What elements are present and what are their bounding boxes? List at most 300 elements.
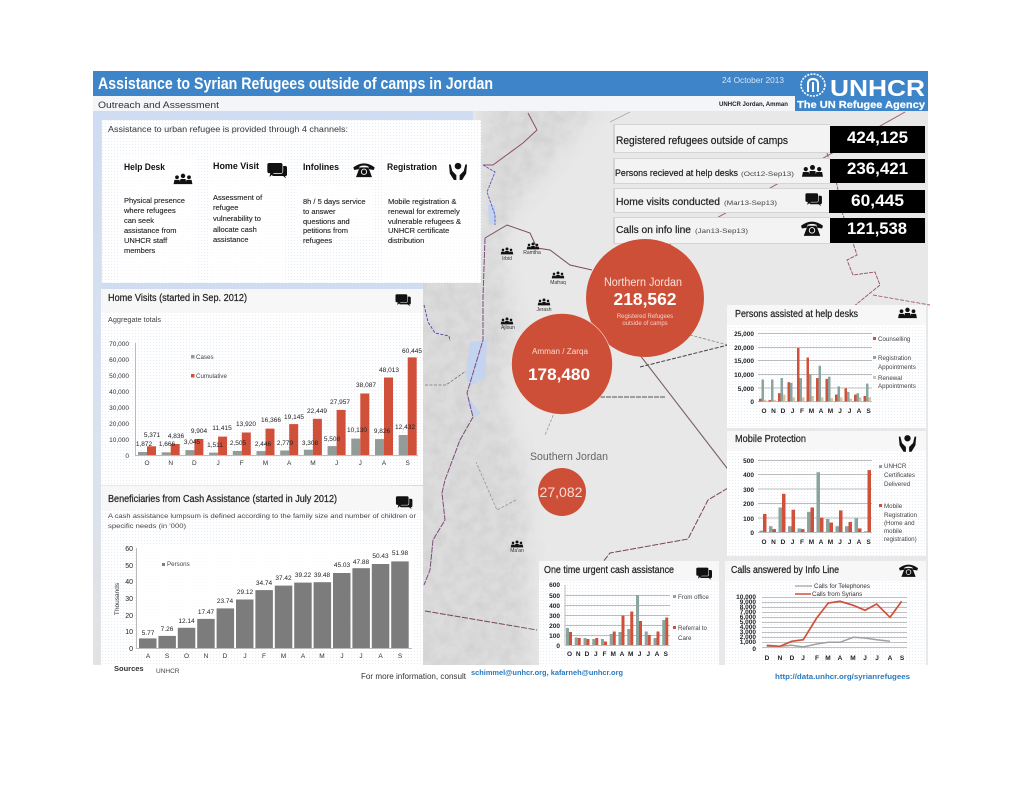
panel: channels — [93, 111, 481, 289]
channel: registration: renewal for extremely — [388, 207, 460, 216]
bar chart: beneficiaries: 7.26 — [161, 626, 174, 633]
heading — [539, 561, 719, 581]
channel: infolines: refugees — [303, 236, 332, 245]
bar chart: beneficiaries: M — [319, 653, 325, 660]
bar chart: urgent cash: J — [594, 651, 598, 658]
bar chart: mobile protection: J — [848, 539, 852, 546]
line chart: calls — [736, 583, 907, 662]
circle: Amman / Zarqa: Amman / Zarqa — [532, 347, 589, 356]
map city markers: Ramtha — [523, 250, 541, 256]
bar chart: home visits: 38,087 — [356, 382, 376, 389]
map: international borders — [424, 112, 930, 630]
circle: Northern Jordan: Registered Refugees — [617, 314, 673, 320]
bar chart: home visits: 4,836 — [168, 433, 185, 440]
circle: Southern Jordan — [538, 468, 586, 516]
channel: infolines: 8h / 5 days service — [303, 197, 366, 206]
bar chart: beneficiaries: J — [340, 653, 344, 660]
bar chart: beneficiaries: 10 — [125, 629, 133, 636]
legend: registration) — [884, 536, 917, 543]
bar chart: mobile protection — [743, 458, 918, 546]
channel: home visit — [213, 161, 287, 244]
channel: registration: vulnerable refugees & — [388, 217, 461, 226]
bar chart: home visits: 40,000 — [109, 389, 129, 396]
bar chart: beneficiaries: 20 — [125, 613, 133, 620]
bar chart: home visits: 50,000 — [109, 373, 129, 380]
footer: contact: For more information, consult — [361, 672, 467, 681]
figure: home visits: (Mar13-Sep13) — [724, 200, 777, 207]
bar chart: beneficiaries — [114, 545, 412, 660]
figure: registered refugees — [613, 124, 925, 153]
channel: registration — [387, 162, 467, 245]
bar chart: home visits — [109, 341, 422, 467]
heading — [725, 561, 926, 581]
bar chart: beneficiaries: A — [146, 653, 151, 660]
line chart: calls: A — [888, 655, 893, 662]
circle: Northern Jordan — [586, 239, 704, 357]
bar chart: home visits: 12,432 — [395, 424, 415, 431]
figure: calls on info line: (Jan13-Sep13) — [695, 228, 748, 235]
bar chart: beneficiaries: 50 — [125, 563, 133, 570]
bar chart: home visits: M — [263, 460, 268, 467]
bar chart: help desks: N — [771, 408, 776, 415]
legend: Calls for Telephones — [814, 583, 870, 590]
panel: key figures — [613, 124, 925, 244]
bar chart: urgent cash: M — [611, 651, 616, 658]
panel: home visits — [101, 289, 423, 485]
bar chart: home visits: 9,826 — [374, 428, 391, 435]
bar chart: help desks: M — [809, 408, 814, 415]
bar chart: home visits: 48,013 — [379, 367, 399, 374]
bar chart: beneficiaries: 0 — [129, 646, 133, 653]
bar chart: home visits: 9,904 — [191, 428, 208, 435]
bar chart: beneficiaries: O — [184, 653, 189, 660]
line chart: calls: N — [778, 655, 783, 662]
logo: UNHCR — [795, 71, 928, 111]
legend — [879, 463, 918, 543]
bar chart: home visits: 20,000 — [109, 421, 129, 428]
channel: infolines: Infolines — [303, 162, 339, 172]
line chart: calls: D — [790, 655, 795, 662]
panel: mobile protection — [727, 431, 926, 556]
channel: help desk: members — [124, 246, 156, 255]
line chart: calls: 1,000 — [740, 639, 756, 646]
line chart: calls: A — [838, 655, 843, 662]
bar chart: beneficiaries: 51.98 — [392, 550, 409, 557]
bar chart: beneficiaries: A — [301, 653, 306, 660]
channel: registration: Mobile registration & — [388, 197, 456, 206]
map city markers: Mafraq — [550, 280, 566, 286]
bar chart: mobile protection: A — [857, 539, 862, 546]
bar chart: home visits: 19,145 — [284, 414, 304, 421]
bar chart: mobile protection: F — [800, 539, 804, 546]
bar chart: help desks: 15,000 — [734, 358, 754, 365]
legend: Appointments — [878, 364, 916, 371]
line chart: calls: 8,000 — [740, 604, 756, 611]
note — [108, 513, 417, 530]
bar chart: beneficiaries: 30 — [125, 596, 133, 603]
heading: Calls answered by Info Line — [731, 565, 839, 576]
line chart: calls: 2,000 — [740, 634, 756, 641]
bar chart: mobile protection: S — [866, 539, 871, 546]
heading: Home Visits (started in Sep. 2012) — [108, 293, 247, 304]
bar chart: home visits: 13,920 — [236, 421, 256, 428]
legend: Delivered — [884, 481, 911, 488]
bar chart: home visits: 11,415 — [212, 425, 232, 432]
legend: Registration — [884, 512, 918, 519]
bar chart: help desks: 5,000 — [738, 386, 754, 393]
bar chart: beneficiaries: D — [223, 653, 228, 660]
bar chart: help desks: M — [828, 408, 833, 415]
channel: registration: Registration — [387, 162, 437, 172]
bar chart: beneficiaries: M — [281, 653, 286, 660]
bar chart: mobile protection: 0 — [750, 530, 754, 537]
bar chart: urgent cash: 300 — [549, 613, 560, 620]
note: A cash assistance lumpsum is defined according to the family size and number of children or — [108, 513, 417, 520]
bar chart: help desks: F — [800, 408, 804, 415]
channel: home visit: vulnerability to — [213, 214, 261, 223]
circle: Northern Jordan: 218,562 — [614, 289, 677, 309]
footer: contact — [361, 670, 623, 681]
figure: registered refugees: Registered refugees outside of camps — [616, 135, 788, 147]
bar chart: mobile protection: 200 — [743, 501, 754, 508]
bar chart: urgent cash: 400 — [549, 603, 560, 610]
legend: Care — [678, 635, 692, 642]
bar chart: mobile protection: D — [781, 539, 786, 546]
bar chart: beneficiaries: 39.22 — [295, 572, 312, 579]
figure: home visits: Home visits conducted — [616, 196, 720, 208]
channel: home visit: Assessment of — [213, 193, 263, 202]
figure: calls on info line: Calls on info line — [616, 224, 691, 236]
bar chart: home visits: 22,449 — [307, 408, 327, 415]
map: Jordan river and Dead Sea — [466, 205, 495, 418]
channel: help desk: UNHCR staff — [124, 236, 168, 245]
legend: Certificates — [884, 472, 915, 479]
bar chart: mobile protection: M — [828, 539, 833, 546]
line chart: calls: J — [801, 655, 805, 662]
bar chart: home visits: 1,666 — [159, 441, 176, 448]
bar chart: beneficiaries: J — [243, 653, 247, 660]
figure: home visits — [613, 188, 925, 213]
legend: Referral to — [678, 625, 707, 632]
bar chart: urgent cash: N — [576, 651, 581, 658]
bar chart: mobile protection: J — [791, 539, 795, 546]
bar chart: home visits: A — [382, 460, 387, 467]
legend: Calls from Syrians — [812, 591, 862, 598]
heading: One time urgent cash assistance — [544, 565, 674, 576]
bar chart: home visits: 10,130 — [347, 427, 367, 434]
circle: Northern Jordan: outside of camps — [622, 321, 668, 327]
bar chart: help desks: 25,000 — [734, 331, 754, 338]
bar chart: mobile protection: 500 — [743, 458, 754, 465]
legend: UNHCR — [884, 463, 907, 470]
panel: one time urgent cash — [539, 561, 719, 665]
footer: sources: UNHCR — [156, 668, 180, 675]
figure: persons at help desks: 236,421 — [847, 159, 908, 178]
channel: help desk: can seek — [124, 216, 154, 225]
bar chart: home visits: 27,957 — [330, 399, 350, 406]
bar chart: home visits: 16,366 — [261, 417, 281, 424]
figure: registered refugees: 424,125 — [847, 128, 908, 147]
line: Jordanian calls — [767, 637, 890, 647]
header band — [93, 71, 928, 96]
bar chart: home visits: 3,045 — [184, 439, 201, 446]
map city markers: Ajloun — [501, 325, 515, 331]
bar chart: mobile protection: 100 — [743, 516, 754, 523]
bar chart: beneficiaries: 60 — [125, 546, 133, 553]
bar chart: beneficiaries: 29.12 — [237, 589, 254, 596]
bar chart: beneficiaries: Thousands — [114, 582, 121, 615]
bar chart: home visits: 2,446 — [255, 441, 272, 448]
bar chart: home visits: 10,000 — [109, 437, 129, 444]
channel: help desk: Help Desk — [124, 162, 166, 172]
footer: sources: Sources — [114, 664, 144, 673]
legend: Mobile — [884, 503, 903, 510]
bar chart: home visits: 70,000 — [109, 341, 129, 348]
line chart: calls: J — [875, 655, 879, 662]
bar chart: home visits: 60,445 — [402, 348, 422, 355]
title: Assistance to Syrian Refugees outside of camps in Jordan — [98, 74, 493, 93]
map city markers: Ma'an — [510, 548, 524, 554]
legend: mobile — [884, 528, 903, 535]
bar chart: beneficiaries: 5.77 — [142, 630, 155, 637]
legend — [673, 594, 709, 642]
bar chart: mobile protection: M — [809, 539, 814, 546]
heading — [101, 486, 423, 510]
bar chart: help desks: J — [838, 408, 842, 415]
bar chart: home visits: J — [216, 460, 220, 467]
bar chart: help desks — [734, 331, 916, 415]
legend: From office — [678, 594, 709, 601]
bar chart: beneficiaries: 12.14 — [178, 618, 195, 625]
line chart: calls: D — [765, 655, 770, 662]
bar chart: home visits: 5,371 — [144, 432, 161, 439]
bar chart: urgent cash: D — [585, 651, 590, 658]
heading — [727, 305, 926, 325]
channel: home visit: allocate cash — [213, 225, 257, 234]
bar chart: beneficiaries: 34.74 — [256, 580, 273, 587]
legend: Cumulative — [196, 373, 228, 380]
line chart: calls: 0 — [752, 646, 756, 653]
footer: link: http://data.unhcr.org/syrianrefugees — [775, 674, 910, 681]
footer: sources — [114, 664, 180, 675]
circle: Southern Jordan: 27,082 — [540, 484, 583, 500]
figure: calls on info line — [613, 217, 925, 244]
bar chart: urgent cash — [549, 582, 709, 658]
bar chart: beneficiaries: 39.48 — [314, 572, 331, 579]
channel: infolines: to answer — [303, 207, 336, 216]
channel: help desk — [123, 162, 192, 255]
bar chart: beneficiaries: J — [359, 653, 363, 660]
line chart: calls: S — [900, 655, 905, 662]
figure: home visits: 60,445 — [851, 191, 904, 210]
heading — [101, 289, 423, 313]
label: Southern Jordan: Southern Jordan — [530, 451, 608, 463]
bar chart: help desks: D — [781, 408, 786, 415]
panel: cash assistance — [101, 486, 423, 665]
bar chart: home visits: 30,000 — [109, 405, 129, 412]
bar chart: home visits: 5,508 — [324, 436, 341, 443]
channel: infolines: questions and — [303, 217, 350, 226]
bar chart: beneficiaries: 45.03 — [334, 562, 351, 569]
footer: contact: schimmel@unhcr.org, kafarneh@unhcr.org — [471, 670, 623, 677]
bar chart: urgent cash: J — [638, 651, 642, 658]
bar chart: home visits: F — [240, 460, 244, 467]
line chart: calls: 6,000 — [740, 614, 756, 621]
bar chart: mobile protection: 400 — [743, 472, 754, 479]
bar chart: beneficiaries: 17.47 — [198, 609, 215, 616]
line chart: calls: 9,000 — [740, 599, 756, 606]
bar chart: home visits: N — [168, 460, 173, 467]
channel: home visit: Home Visit — [213, 161, 259, 171]
bar chart: home visits: D — [192, 460, 197, 467]
bar chart: urgent cash: 100 — [549, 633, 560, 640]
bar chart: home visits: 60,000 — [109, 357, 129, 364]
bar chart: beneficiaries: S — [165, 653, 170, 660]
legend: Persons — [167, 561, 190, 568]
bar chart: urgent cash: 500 — [549, 593, 560, 600]
bar chart: home visits: 2,779 — [277, 440, 294, 447]
bar chart: home visits: 1,511 — [207, 442, 223, 449]
subtitle: Outreach and Assessment — [98, 100, 220, 110]
heading: Persons assisted at help desks — [735, 309, 858, 320]
legend — [191, 354, 228, 380]
map background — [93, 110, 930, 665]
bar chart: urgent cash: A — [620, 651, 625, 658]
logo emblem — [801, 74, 825, 96]
office: UNHCR Jordan, Amman — [719, 101, 788, 108]
legend — [795, 583, 870, 598]
circle: Northern Jordan: Northern Jordan — [604, 277, 682, 289]
bar chart: beneficiaries: 50.43 — [372, 553, 389, 560]
bar chart: help desks: O — [761, 408, 767, 415]
bar chart: beneficiaries: 37.42 — [275, 575, 292, 582]
bar chart: urgent cash: A — [655, 651, 660, 658]
bar chart: urgent cash: S — [664, 651, 669, 658]
heading: Mobile Protection — [735, 434, 806, 445]
bar chart: mobile protection: J — [838, 539, 842, 546]
map city markers — [501, 242, 566, 554]
bar chart: urgent cash: 0 — [556, 643, 560, 650]
line chart: calls: 5,000 — [740, 619, 756, 626]
bar chart: urgent cash: F — [603, 651, 607, 658]
legend — [873, 336, 916, 390]
bar chart: mobile protection: O — [761, 539, 767, 546]
date: 24 October 2013 — [722, 76, 785, 85]
circle: Amman / Zarqa — [512, 314, 612, 414]
bar chart: beneficiaries: A — [378, 653, 383, 660]
channel: home visit: assistance — [213, 235, 248, 244]
legend: Appointments — [878, 383, 916, 390]
figure: persons at help desks: (Oct12-Sep13) — [741, 171, 794, 178]
line chart: calls: 10,000 — [736, 594, 756, 601]
bar chart: urgent cash: 200 — [549, 623, 560, 630]
bar chart: help desks: A — [819, 408, 824, 415]
bar chart: home visits: A — [287, 460, 292, 467]
bar chart: mobile protection: A — [819, 539, 824, 546]
panel: calls answered — [725, 561, 926, 665]
line chart: calls: 7,000 — [740, 609, 756, 616]
channel: home visit: refugee — [213, 203, 238, 212]
figure: persons at help desks — [613, 158, 925, 184]
bar chart: help desks: J — [848, 408, 852, 415]
channel: infolines — [303, 162, 375, 245]
legend: Registration — [878, 355, 912, 362]
bar chart: beneficiaries: 47.88 — [353, 559, 370, 566]
channel: help desk: where refugees — [123, 206, 176, 215]
bar chart: beneficiaries: F — [262, 653, 266, 660]
line chart: calls: J — [863, 655, 867, 662]
heading: Beneficiaries from Cash Assistance (started in July 2012) — [108, 494, 337, 505]
line chart: calls: M — [825, 655, 831, 662]
legend: Cases — [196, 354, 214, 361]
line: Syrian calls — [767, 601, 902, 646]
line chart: calls: M — [850, 655, 856, 662]
legend: Renewal — [878, 375, 902, 382]
bar chart: help desks: 10,000 — [734, 372, 754, 379]
bar chart: home visits: O — [144, 460, 150, 467]
channel: infolines: petitions from — [303, 226, 348, 235]
bar chart: home visits: 1,872 — [136, 441, 153, 448]
bar chart: help desks: J — [791, 408, 795, 415]
subheader — [93, 96, 795, 111]
line chart: calls: 3,000 — [740, 629, 756, 636]
bar chart: beneficiaries: 23.74 — [217, 598, 234, 605]
bar chart: home visits: J — [359, 460, 362, 467]
bar chart: help desks: 20,000 — [734, 345, 754, 352]
channel: registration: UNHCR certificate — [388, 226, 449, 235]
channel: registration: distribution — [388, 236, 424, 245]
line chart: calls: 4,000 — [740, 624, 756, 631]
map city markers: Irbid — [502, 256, 512, 262]
intro text: Assistance to urban refugee is provided through 4 channels: — [108, 125, 348, 134]
circle: Amman / Zarqa: 178,480 — [528, 365, 590, 384]
bar chart: urgent cash: J — [646, 651, 650, 658]
figure: calls on info line: 121,538 — [847, 219, 907, 238]
map city markers: Jerash — [536, 307, 552, 313]
note: Aggregate totals — [108, 317, 162, 324]
left blue frame — [93, 110, 102, 665]
bar chart: urgent cash: O — [567, 651, 572, 658]
bar chart: home visits: S — [406, 460, 411, 467]
legend: Counselling — [878, 336, 911, 343]
line chart: calls: F — [815, 655, 819, 662]
logo: UNHCR: UNHCR — [830, 75, 925, 101]
legend: (Home and — [884, 520, 915, 527]
bar chart: beneficiaries: S — [398, 653, 403, 660]
bar chart: beneficiaries: N — [204, 653, 209, 660]
note: specific needs (in '000) — [108, 523, 186, 530]
channel: help desk: Physical presence — [124, 196, 185, 205]
figure: persons at help desks: Persons recieved at help desks — [615, 168, 738, 179]
bar chart: help desks: S — [866, 408, 871, 415]
bar chart: urgent cash: 600 — [549, 582, 560, 589]
heading — [727, 431, 926, 452]
channel: help desk: assistance from — [124, 226, 177, 235]
logo: UNHCR: The UN Refugee Agency — [797, 99, 925, 111]
bar chart: help desks: 0 — [750, 399, 754, 406]
bar chart: mobile protection: 300 — [743, 487, 754, 494]
panel: persons at help desks — [727, 305, 926, 428]
bar chart: help desks: A — [857, 408, 862, 415]
bar chart: home visits: 2,505 — [230, 440, 247, 447]
bar chart: home visits: 0 — [125, 453, 129, 460]
bar chart: mobile protection: N — [771, 539, 776, 546]
bar chart: home visits: 3,308 — [302, 440, 319, 447]
bar chart: home visits: M — [310, 460, 316, 467]
bar chart: beneficiaries: 40 — [125, 579, 133, 586]
bar chart: home visits: J — [335, 460, 338, 467]
bar chart: urgent cash: M — [628, 651, 633, 658]
